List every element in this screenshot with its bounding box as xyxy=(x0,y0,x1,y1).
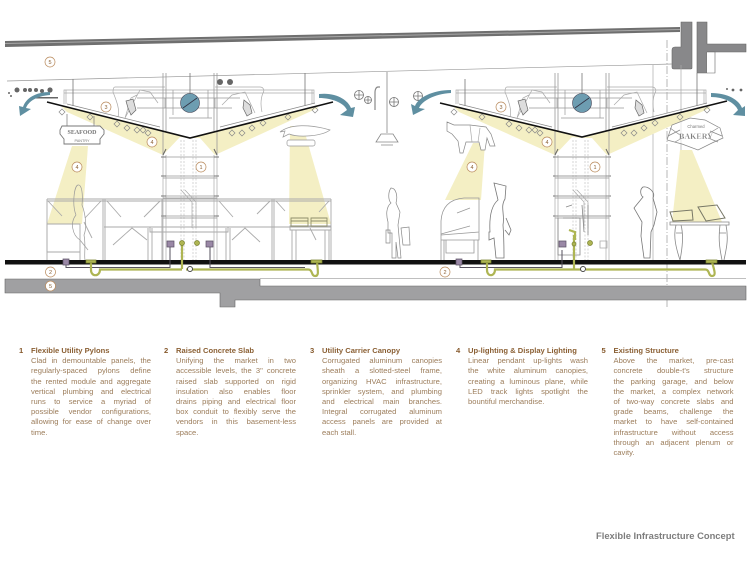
text block: 1 Flexible Utility Pylons: time. xyxy=(31,428,47,436)
text block: 3 Utility Carrier Canopy: Utility Carrier Canopy xyxy=(322,346,400,355)
existing structure columns xyxy=(672,22,746,73)
text block: 5 Existing Structure: infrastructure without access xyxy=(614,428,734,436)
text block: 3 Utility Carrier Canopy: access panels are provided at xyxy=(322,417,442,426)
text: 4 xyxy=(456,346,460,355)
callout markers: 3 xyxy=(499,105,503,111)
icon: fish xyxy=(280,126,330,146)
icon: pendant lamp xyxy=(375,72,398,145)
text block: 5 Existing Structure xyxy=(602,346,734,457)
sprinkler and ceiling fixtures xyxy=(8,79,742,107)
right stall: display case, figures xyxy=(386,157,729,260)
text block: 4 Up-lighting & Display Lighting: the white aluminum canopies, xyxy=(468,366,588,375)
floor slab xyxy=(5,260,746,264)
text block: 5 Existing Structure: concrete double-t's structure xyxy=(614,366,734,375)
text block: 4 Up-lighting & Display Lighting: Up-lighting & Display Lighting xyxy=(468,346,577,355)
lower structure slab xyxy=(5,278,746,307)
text block: 1 Flexible Utility Pylons xyxy=(19,346,151,436)
text block: 3 Utility Carrier Canopy xyxy=(310,346,442,436)
text block: 3 Utility Carrier Canopy: sprinkler system, and plumbing xyxy=(322,387,442,396)
text block: 2 Raised Concrete Slab: drains piping and electrical floor xyxy=(176,397,296,406)
text block: 2 Raised Concrete Slab: Raised Concrete Slab xyxy=(176,346,254,355)
light beams xyxy=(47,126,722,224)
arrows xyxy=(19,90,745,117)
callout markers: 4 xyxy=(150,140,154,146)
text block: 2 Raised Concrete Slab: vendors in this basement-less xyxy=(176,417,296,426)
text block: 1 Flexible Utility Pylons: Flexible Utility Pylons xyxy=(31,346,110,355)
sign: seafood: PANTRY xyxy=(74,139,90,143)
text block: 1 Flexible Utility Pylons: runs to service a myriad of xyxy=(31,397,151,406)
ceiling hanger line xyxy=(7,40,681,307)
callout markers: 4 xyxy=(470,165,474,171)
text block: 5 Existing Structure: Above the market, pre-cast xyxy=(614,356,734,365)
callout markers: 4 xyxy=(545,140,549,146)
section drawing xyxy=(4,22,746,308)
text block: 4 Up-lighting & Display Lighting: Linear pendant up-lights wash xyxy=(468,356,588,365)
callout markers xyxy=(45,57,600,291)
sign: bakery: Charmed xyxy=(687,124,705,129)
title: Flexible Infrastructure Concept xyxy=(596,530,735,541)
sign: seafood: SEAFOOD xyxy=(67,130,97,136)
callout markers: 2 xyxy=(443,270,447,276)
text block: 3 Utility Carrier Canopy: and electrical main branches. xyxy=(322,397,442,406)
sign: bakery: BAKERY xyxy=(679,132,713,141)
text block: 5 Existing Structure: cavity. xyxy=(614,448,634,457)
top beam: parking garage double-tee xyxy=(5,27,680,47)
drain piping xyxy=(86,230,717,276)
electrical conduit xyxy=(63,241,566,268)
text block: 2 Raised Concrete Slab: space. xyxy=(176,428,198,436)
text block: 3 Utility Carrier Canopy: Integral corrugated aluminum xyxy=(322,407,442,416)
text block: 3 Utility Carrier Canopy: organizing HVAC infrastructure, xyxy=(322,377,442,386)
text block: 2 Raised Concrete Slab: box conduit to flexibly serve the xyxy=(176,407,296,416)
text block: 4 Up-lighting & Display Lighting: bountiful merchandise. xyxy=(468,397,544,406)
text block: 1 Flexible Utility Pylons: Clad in demountable panels, the xyxy=(31,356,151,365)
text block: 1 Flexible Utility Pylons: the rented module and aggregate xyxy=(31,377,151,386)
callout markers: 3 xyxy=(104,105,108,111)
text block: 1 Flexible Utility Pylons: allowing for ease of change over xyxy=(31,417,151,426)
text block: 2 Raised Concrete Slab xyxy=(164,346,296,436)
text: 2 xyxy=(164,346,168,355)
ducts xyxy=(180,94,592,112)
text: 3 xyxy=(310,346,314,355)
callout markers: 1 xyxy=(593,165,597,171)
text block: 2 Raised Concrete Slab: insulation also enables floor xyxy=(176,387,296,396)
callout markers: 2 xyxy=(49,270,52,276)
callout markers: 5 xyxy=(48,60,52,66)
text block: 4 Up-lighting & Display Lighting: LED track lights spotlight the xyxy=(468,387,588,396)
text block: 5 Existing Structure: of two-way concrete slabs and xyxy=(614,397,734,406)
utility module left xyxy=(59,73,318,260)
text block: 2 Raised Concrete Slab: accessible levels, the 3" concrete xyxy=(176,366,296,375)
utility module right xyxy=(451,73,710,260)
callout markers: 5 xyxy=(49,284,52,290)
left stall frame xyxy=(47,185,331,260)
text block: 4 Up-lighting & Display Lighting xyxy=(456,346,588,406)
text block: 2 Raised Concrete Slab: Unifying the market in two xyxy=(176,356,296,365)
text block: 1 Flexible Utility Pylons: regularly-spaced pylons define xyxy=(31,366,151,375)
canopy black lines xyxy=(47,101,727,138)
text block: 3 Utility Carrier Canopy: Corrugated aluminum canopies xyxy=(322,356,442,365)
text block: 5 Existing Structure: through an adjacent plenum or xyxy=(614,438,734,447)
text block: 5 Existing Structure: the market, a complex network xyxy=(614,387,734,396)
text block: 1 Flexible Utility Pylons: possible vendor configurations, xyxy=(31,407,151,416)
text block: 5 Existing Structure: Existing Structure xyxy=(614,346,679,355)
callout markers: 1 xyxy=(199,165,203,171)
sign: seafood xyxy=(60,114,104,144)
text block: 5 Existing Structure: grade beams, challenge the xyxy=(614,407,734,416)
sign: bakery xyxy=(667,118,723,150)
text: 5 xyxy=(602,346,606,355)
text block: 1 Flexible Utility Pylons: vertical plumbing and electrical xyxy=(31,387,151,396)
callout markers: 4 xyxy=(75,165,79,171)
text block: 3 Utility Carrier Canopy: each stall. xyxy=(322,428,356,436)
text block: 2 Raised Concrete Slab: raised slab supported on rigid xyxy=(176,377,296,386)
text block: 5 Existing Structure: the parking garage, and below xyxy=(614,377,734,386)
text: 1 xyxy=(19,346,23,355)
text block: 3 Utility Carrier Canopy: sheath a slotted-steel frame, xyxy=(322,366,442,375)
text block: 5 Existing Structure: market to have self-contained xyxy=(614,417,734,426)
icon: cow xyxy=(447,122,495,153)
text block: 4 Up-lighting & Display Lighting: creating a luminous plane, while xyxy=(468,377,588,386)
